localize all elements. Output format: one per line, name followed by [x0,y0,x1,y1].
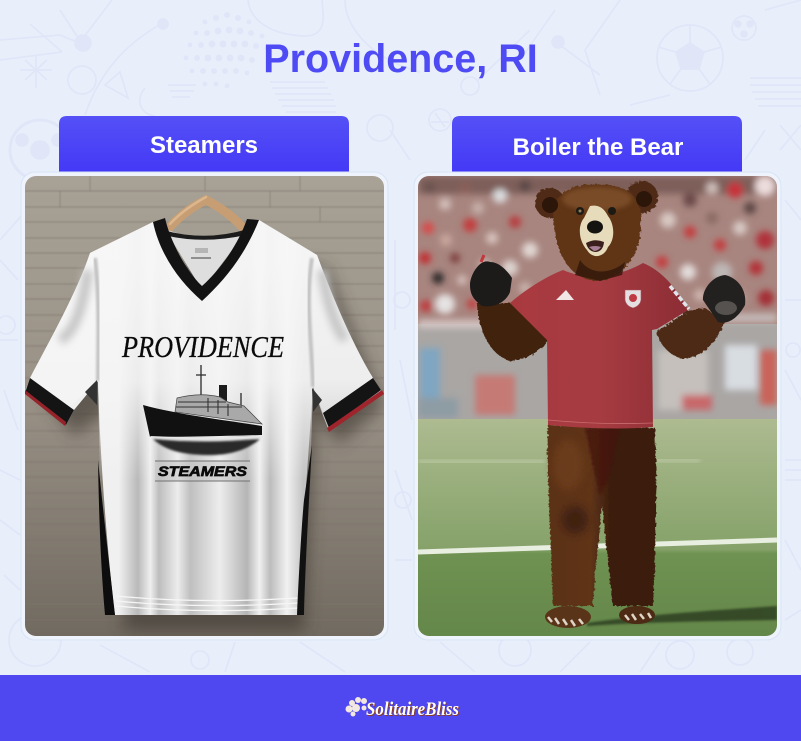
right cuff [323,378,381,428]
footer logo: Solitaire Bliss: SolitaireBliss [366,699,459,720]
jersey wordmark STEAMERS [155,461,250,481]
ship graphic [143,365,262,455]
bear feet [545,606,655,628]
footer logo: Solitaire Bliss: SolitaireBliss [367,700,460,721]
image frame [414,172,781,640]
heading tab: Steamers [59,116,349,172]
heading tab: Boiler the Bear [452,116,742,172]
pitch line [418,540,777,552]
pitch [418,419,777,636]
shirt shadow [44,266,384,631]
side panels [98,460,115,615]
panel: Steamers [21,116,388,640]
footer logo: Solitaire Bliss [346,697,460,721]
bear hands [470,255,745,323]
bear legs [548,425,656,606]
jersey logo mark [556,290,574,300]
footer band [0,675,801,741]
jersey wordmark PROVIDENCE: PROVIDENCE [121,329,284,364]
image: bear mascot on soccer pitch [418,176,777,636]
collar [153,218,259,301]
heading tab: Boiler the Bear: Boiler the Bear [513,134,683,161]
bear jersey [510,263,689,428]
shirt body [25,220,383,615]
panel: Boiler the Bear [414,116,781,640]
title: Providence, RI [263,37,538,81]
shirt back neck [168,230,240,286]
hanger [168,197,244,229]
heading tab: Steamers: Steamers [150,132,258,159]
crowd [418,176,777,326]
jersey crest [625,290,641,308]
image frame [21,172,388,640]
bear arms [477,303,725,361]
bear head [535,181,658,281]
left cuff [25,378,74,425]
image: Steamers jersey on hanger against brick wall [25,176,384,636]
foot shadow [587,606,777,626]
stadium barrier and lower stands [418,324,777,420]
jersey wordmark STEAMERS: STEAMERS [158,463,248,479]
